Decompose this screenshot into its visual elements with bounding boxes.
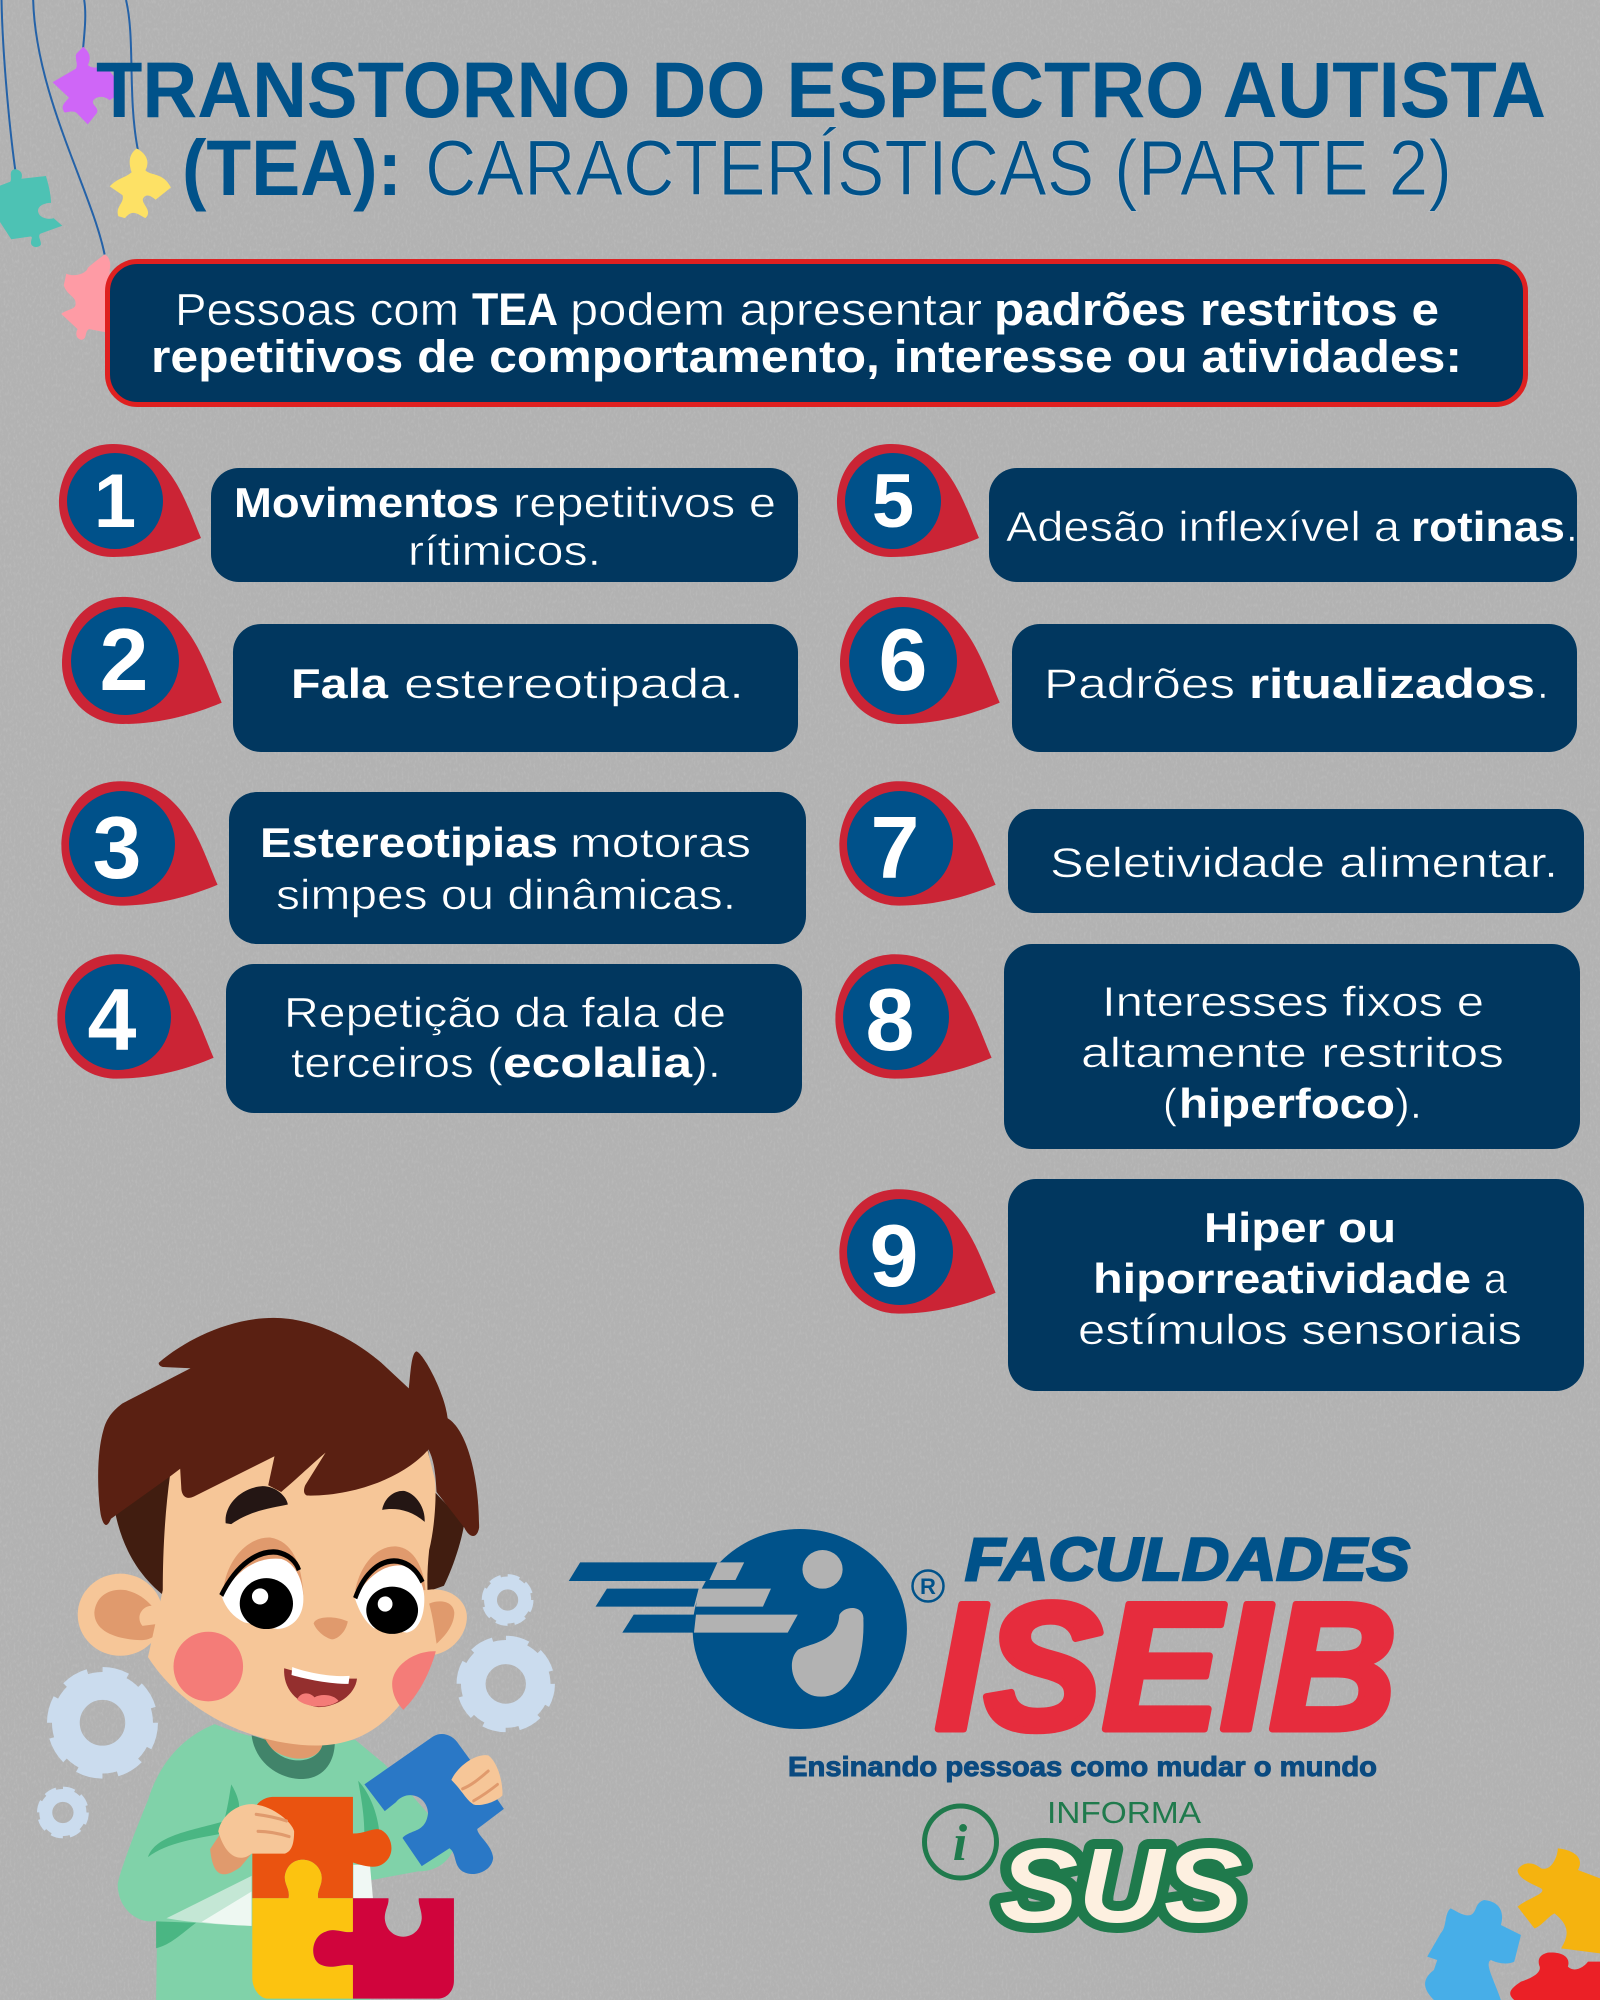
item 5: rotinas: [1411, 503, 1565, 550]
icon: yellow puzzle piece: [252, 1860, 353, 1999]
logo: Faculdades ISEIB: [569, 1526, 1410, 1782]
item 6: [840, 597, 1577, 752]
item 8: [835, 944, 1580, 1149]
icon: orange puzzle piece: [252, 1797, 391, 1898]
item 4: Repetição da fala de: [284, 989, 726, 1036]
item 1: rítimicos.: [408, 527, 601, 574]
item 1: [59, 444, 798, 582]
item 7: [839, 781, 1584, 913]
illustration: boy holding puzzle: [39, 1318, 551, 2000]
item 6: .: [1537, 660, 1549, 707]
icon: blue puzzle piece: [364, 1734, 504, 1874]
logo: Informa SUS: [924, 1795, 1243, 1945]
logo: Faculdades ISEIB: Ensinando pessoas como mudar o mundo: [788, 1751, 1377, 1782]
item 2: [62, 597, 798, 752]
item 3: Estereotipias: [260, 819, 558, 866]
title: TRANSTORNO DO ESPECTRO AUTISTA: [96, 45, 1546, 134]
item 5: [837, 444, 1578, 582]
icon: gears: [39, 1576, 551, 1837]
item 5: Adesão inflexível a: [1006, 503, 1401, 550]
panel: introduction: podem apresentar: [570, 284, 982, 335]
item 4: 4: [88, 970, 137, 1069]
item 9: hiporreatividade: [1093, 1255, 1471, 1302]
item 9: estímulos sensoriais: [1078, 1306, 1522, 1353]
panel: introduction: [108, 262, 1526, 404]
item 9: a: [1484, 1255, 1508, 1302]
logo: Informa SUS: i: [953, 1815, 968, 1872]
item 4: ecolalia: [503, 1039, 693, 1086]
item 5: 5: [872, 459, 914, 544]
item 8: hiperfoco: [1179, 1080, 1395, 1127]
item 7: Seletividade alimentar.: [1050, 839, 1558, 886]
item 6: ritualizados: [1249, 660, 1535, 707]
item 3: simpes ou dinâmicas.: [276, 871, 736, 918]
item 9: Hiper ou: [1204, 1204, 1396, 1251]
panel: introduction: Pessoas com: [175, 284, 459, 335]
title: CARACTERÍSTICAS (PARTE 2): [425, 123, 1452, 212]
item 3: motoras: [570, 819, 751, 866]
item 5: .: [1566, 503, 1578, 550]
item 1: 1: [94, 459, 136, 544]
item 8: (: [1163, 1080, 1177, 1127]
panel: introduction: repetitivos de comportamento, interesse ou atividades:: [151, 331, 1462, 382]
item 3: [61, 781, 806, 944]
hanging puzzle pieces: [0, 0, 171, 340]
item 6: Padrões: [1044, 660, 1235, 707]
item 8: 8: [866, 970, 914, 1069]
logo: Faculdades ISEIB: ISEIB: [935, 1566, 1397, 1768]
item 9: [839, 1179, 1584, 1391]
logo: Informa SUS: INFORMA: [1047, 1795, 1201, 1830]
item 8: ).: [1395, 1080, 1422, 1127]
item 2: estereotipada.: [404, 660, 744, 707]
item 8: Interesses fixos e: [1102, 978, 1484, 1025]
item 4: [57, 954, 802, 1113]
item 1: repetitivos e: [513, 479, 776, 526]
icon: red puzzle piece: [313, 1898, 454, 1999]
logo: Informa SUS: SUS: [999, 1827, 1243, 1945]
item 8: altamente restritos: [1081, 1029, 1504, 1076]
item 2: Fala: [291, 660, 389, 707]
panel: introduction: padrões restritos e: [994, 284, 1439, 335]
item 2: 2: [100, 610, 148, 709]
item 4: ).: [692, 1039, 721, 1086]
panel: introduction: TEA: [472, 284, 558, 335]
title: (TEA):: [182, 123, 402, 212]
item 4: terceiros (: [291, 1039, 503, 1086]
item 7: 7: [871, 798, 919, 897]
logo: Faculdades ISEIB: FACULDADES: [965, 1526, 1410, 1593]
item 3: 3: [93, 798, 141, 897]
item 9: 9: [870, 1206, 918, 1305]
corner puzzle pieces: [1425, 1848, 1600, 2000]
logo: Faculdades ISEIB: R: [920, 1574, 936, 1599]
item 6: 6: [879, 610, 927, 709]
item 1: Movimentos: [234, 479, 499, 526]
title: [96, 45, 1546, 212]
